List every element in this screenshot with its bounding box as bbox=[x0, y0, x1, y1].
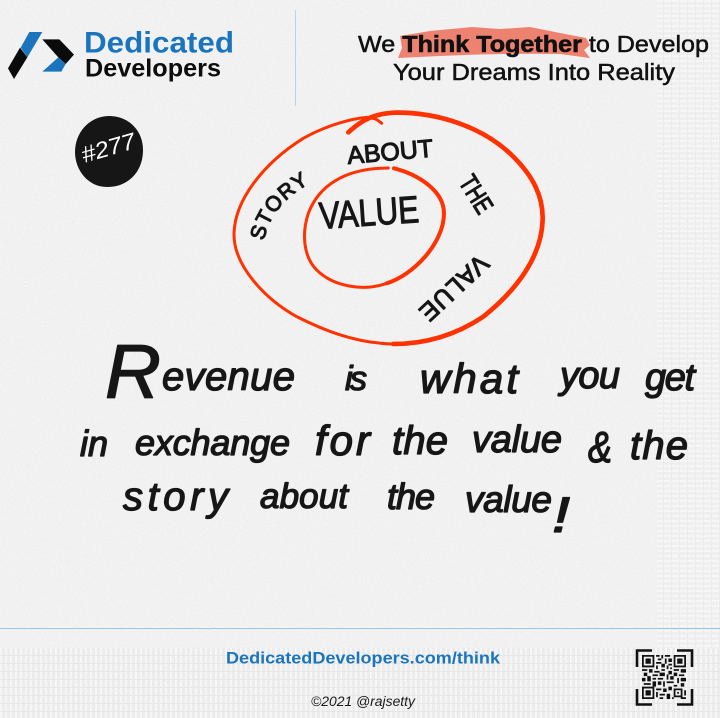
quote line 3: story bbox=[123, 475, 231, 519]
footer link: DedicatedDevelopers.com/think bbox=[226, 648, 501, 668]
quote line 2: the bbox=[392, 419, 448, 463]
header tagline bbox=[358, 27, 709, 85]
QR corner brackets bbox=[637, 650, 692, 704]
label: THE: THE bbox=[453, 169, 500, 219]
quote line 1 bbox=[105, 330, 696, 415]
inner circle: value bbox=[305, 168, 444, 287]
tagline line 1: We Think Together to Develop bbox=[358, 31, 709, 57]
quote line 2: in bbox=[80, 423, 108, 464]
quote line 3: the bbox=[387, 476, 435, 517]
quote line 2: value bbox=[472, 419, 562, 461]
copyright: ©2021 @rajsetty bbox=[311, 694, 416, 709]
icon: logo mark bbox=[8, 32, 74, 79]
quote line 3: about bbox=[260, 477, 349, 516]
quote line 1: R bbox=[105, 330, 161, 415]
quote line 3: value bbox=[465, 479, 552, 520]
label: STORY: STORY bbox=[250, 171, 304, 240]
main quote bbox=[80, 330, 696, 543]
tagline line 2: Your Dreams Into Reality bbox=[393, 59, 676, 85]
quote line 2: & bbox=[588, 423, 612, 472]
quote line 3 bbox=[123, 475, 570, 543]
badge: #277 bbox=[75, 116, 143, 187]
badge: #277: #277 bbox=[78, 127, 139, 168]
quote line 1: get bbox=[645, 357, 696, 399]
icon: QR code bbox=[637, 650, 692, 704]
quote line 3: ! bbox=[552, 487, 570, 543]
quote line 1: evenue bbox=[162, 355, 295, 399]
brush highlight bbox=[398, 27, 590, 58]
quote line 2: for bbox=[315, 417, 372, 464]
quote line 1: you bbox=[557, 355, 620, 397]
quote line 1: what bbox=[420, 355, 520, 402]
QR modules bbox=[642, 655, 686, 699]
logo word: Dedicated: Dedicated bbox=[84, 26, 234, 60]
outer circle: story about the value bbox=[234, 113, 543, 344]
label: VALUE center: VALUE bbox=[318, 189, 420, 238]
quote line 2 bbox=[80, 417, 688, 472]
quote line 1: is bbox=[345, 360, 367, 398]
logo word: Developers: Developers bbox=[85, 54, 221, 82]
label: ABOUT: ABOUT bbox=[346, 135, 434, 170]
diagram: concentric circles bbox=[232, 110, 545, 346]
quote line 2: exchange bbox=[135, 422, 290, 463]
label: VALUE rotated: VALUE bbox=[413, 249, 494, 326]
quote line 2: the bbox=[630, 424, 688, 468]
logo: Dedicated Developers bbox=[8, 26, 234, 82]
